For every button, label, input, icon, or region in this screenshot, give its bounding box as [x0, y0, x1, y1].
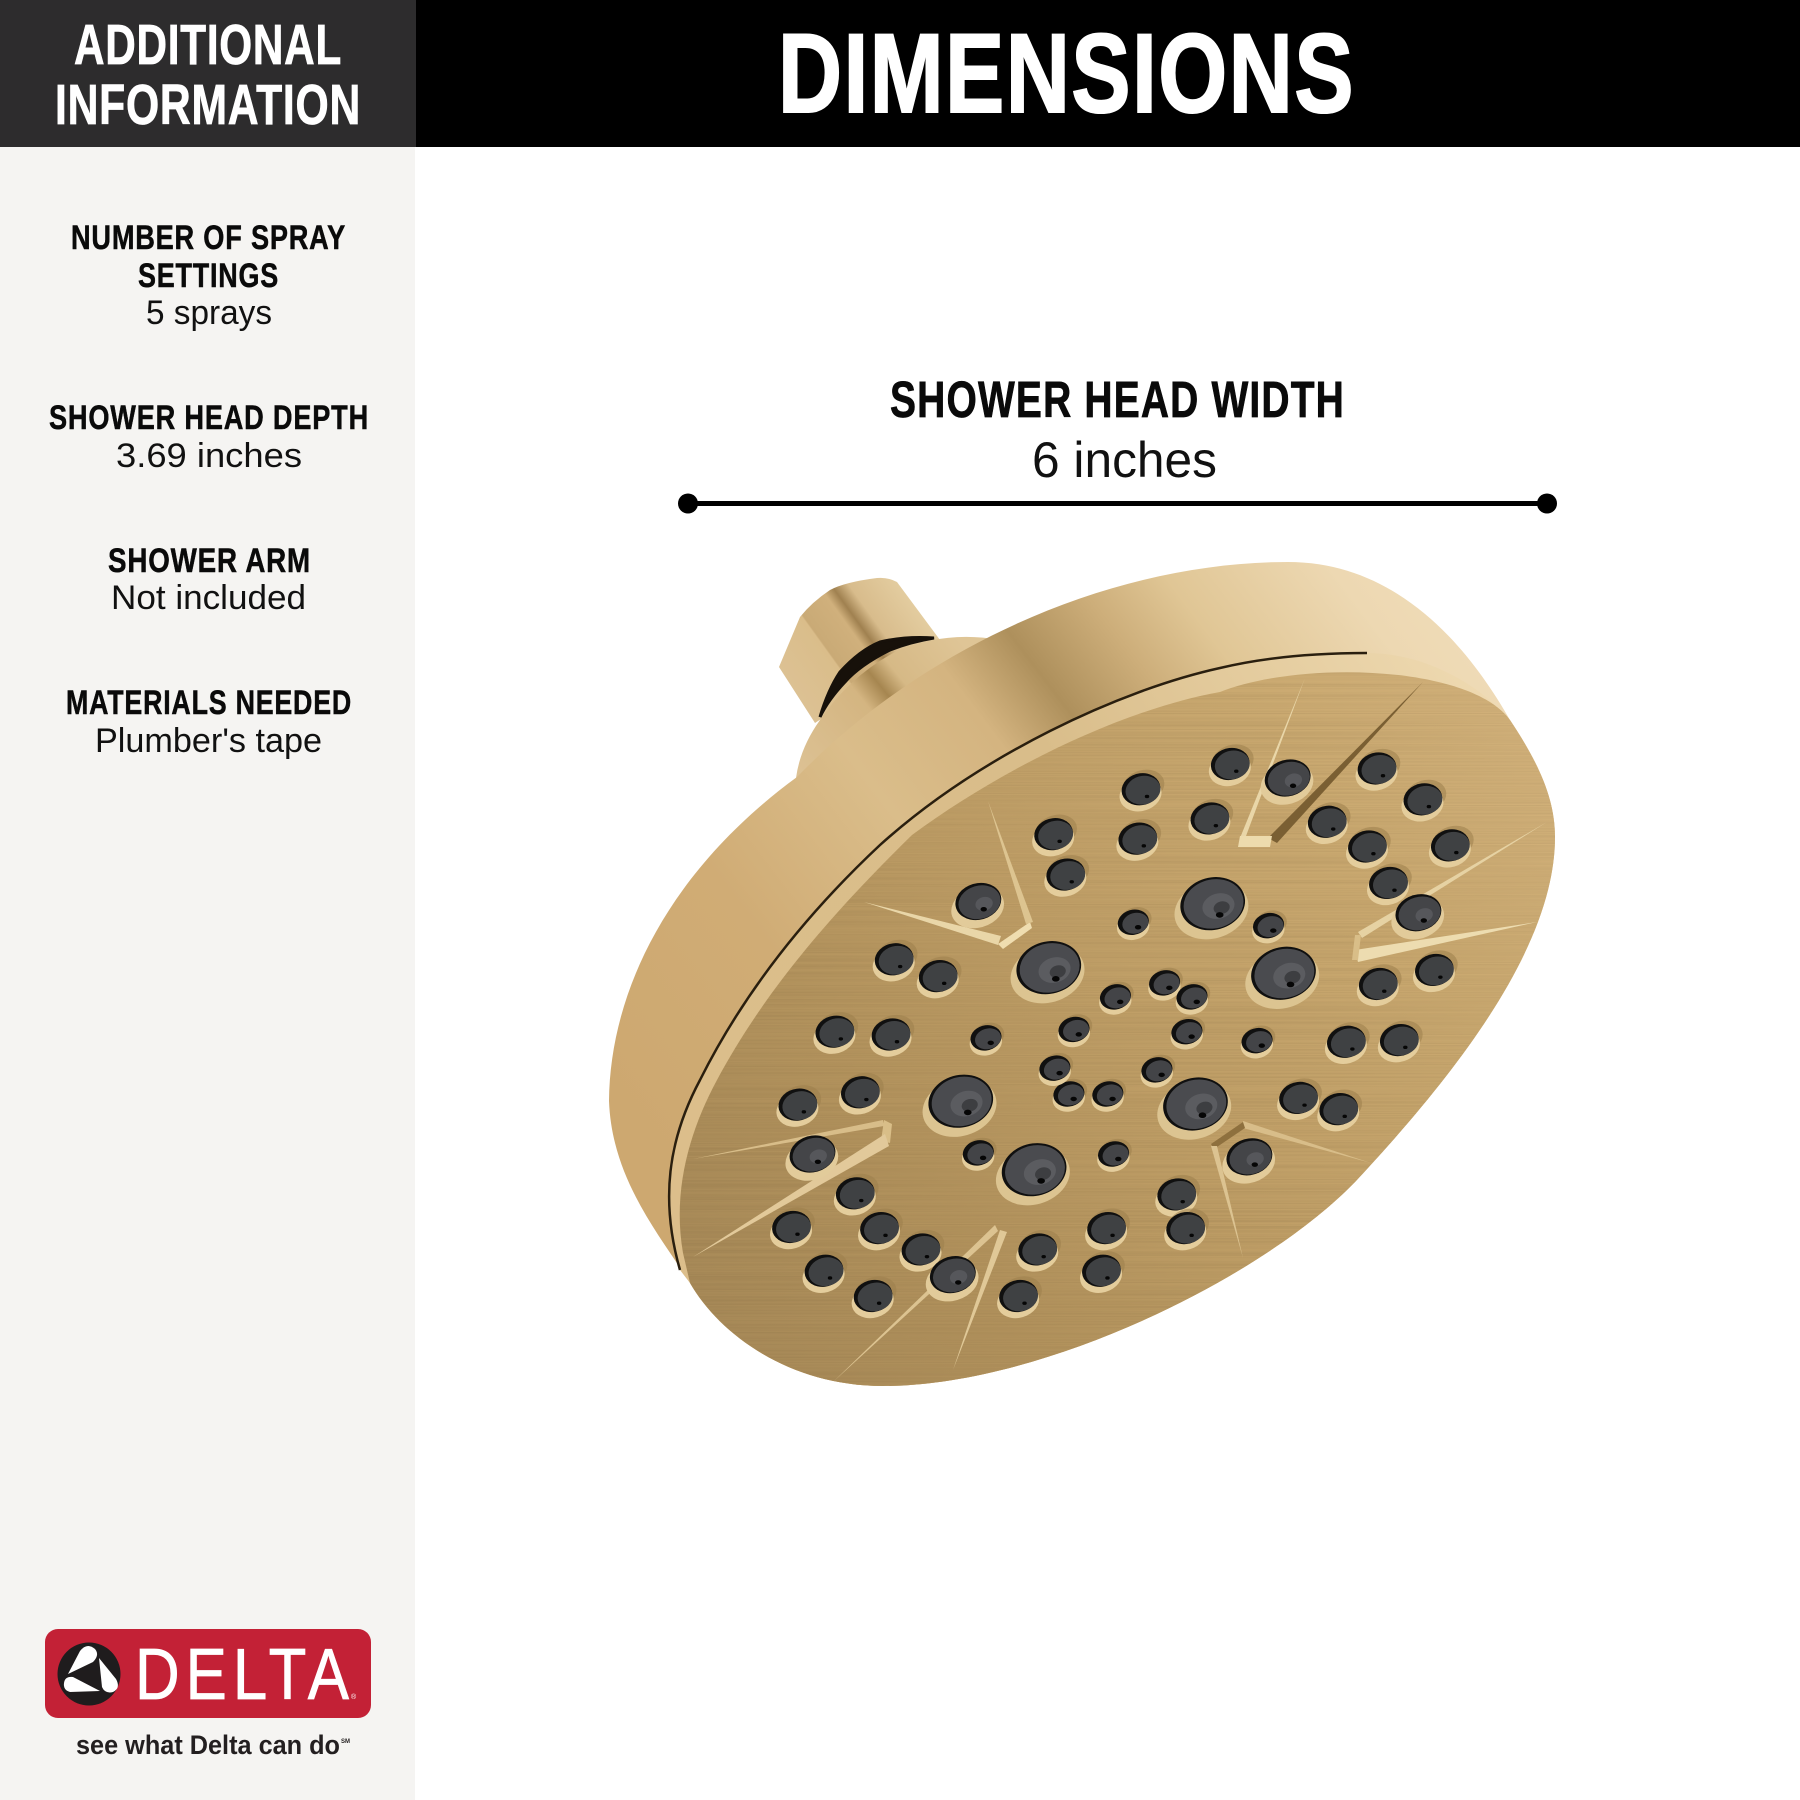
Delta logo: SM: [341, 1739, 350, 1745]
Delta logo: see what Delta can do: [76, 1730, 340, 1760]
title bar: dimensions: DIMENSIONS: [778, 11, 1355, 136]
spec: number of spray settings: NUMBER OF SPRAY: [71, 219, 346, 257]
seam line: [669, 653, 1367, 1270]
sidebar header: ADDITIONAL: [74, 13, 342, 77]
spec: materials needed: Plumber's tape: [95, 722, 322, 760]
spec: shower head depth: SHOWER HEAD DEPTH: [49, 399, 369, 437]
spec: shower head depth: [49, 399, 369, 475]
width label: [890, 371, 1345, 488]
body cylinder: [609, 562, 1555, 1386]
shower arm connector: [779, 578, 940, 723]
spray nozzles: [763, 738, 1480, 1325]
sidebar header: INFORMATION: [55, 73, 361, 137]
spec: materials needed: MATERIALS NEEDED: [66, 684, 352, 722]
face plate rim: [669, 653, 1555, 1386]
spec: materials needed: [66, 684, 352, 760]
spec: number of spray settings: 5 sprays: [146, 294, 272, 332]
spec: shower arm: [108, 542, 311, 617]
width label: 6 inches: [1032, 432, 1217, 488]
width label: SHOWER HEAD WIDTH: [890, 371, 1345, 428]
spec: shower arm: SHOWER ARM: [108, 542, 311, 580]
spec: shower arm: Not included: [111, 579, 306, 617]
panel: additional information sidebar: [0, 0, 416, 1800]
collar: [796, 637, 1060, 830]
Delta logo: ®: [351, 1693, 357, 1701]
icon: Delta trefoil: [58, 1642, 120, 1706]
face plate: [680, 672, 1555, 1386]
Delta logo: [45, 1629, 371, 1760]
spec: number of spray settings: SETTINGS: [138, 257, 279, 295]
sidebar header: [0, 0, 416, 147]
width dimension line: [678, 494, 1557, 514]
shower head illustration: [600, 562, 1600, 1410]
spec: number of spray settings: [71, 219, 346, 332]
Delta logo: DELTA: [135, 1635, 355, 1715]
spec: shower head depth: 3.69 inches: [116, 437, 302, 475]
title bar: dimensions: [416, 0, 1800, 147]
star grooves: [693, 678, 1547, 1382]
